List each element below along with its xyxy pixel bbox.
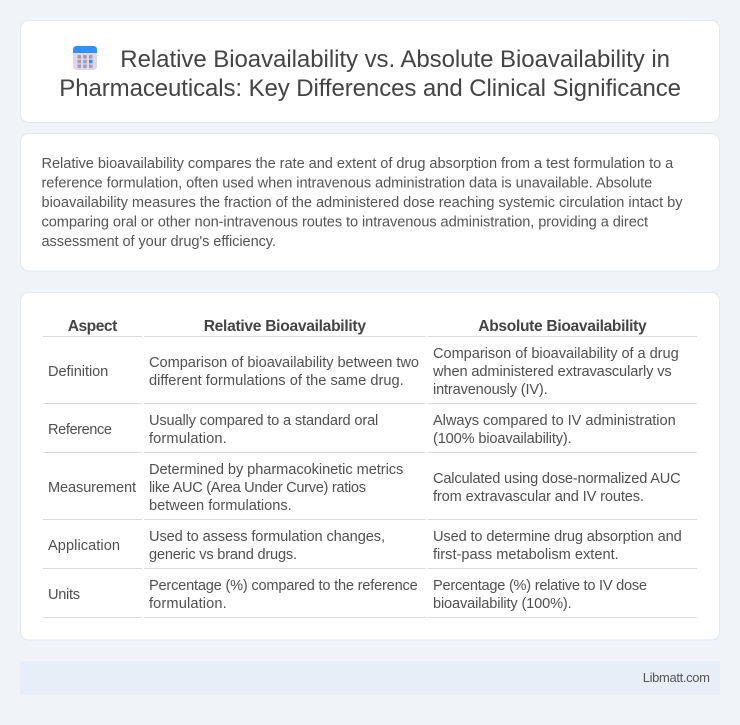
panel: comparison table (20, 292, 720, 640)
table row: definition: when administered extravascularly vs (432, 364, 672, 380)
panel: title header (20, 20, 720, 122)
table row: application: generic vs brand drugs. (149, 547, 297, 563)
title: Relative Bioavailability vs. Absolute Bioavailability in (120, 46, 670, 73)
icon: calendar (73, 46, 97, 70)
table row: units: Units (48, 587, 80, 603)
text block: introduction paragraph (42, 156, 683, 250)
table row: application: Used to assess formulation changes, (149, 529, 385, 545)
table row: measurement: like AUC (Area Under Curve) ratios (149, 480, 366, 496)
table row: definition: Comparison of bioavailability between two (149, 355, 419, 371)
table row: measurement: from extravascular and IV routes. (433, 489, 644, 505)
table row: units: Percentage (%) relative to IV dose (433, 578, 647, 594)
table row: definition (48, 346, 679, 398)
table row: reference: Reference (48, 422, 112, 438)
table row: application: Application (48, 538, 120, 554)
text block: introduction paragraph: assessment of your drug's efficiency. (42, 234, 276, 250)
table row: definition: different formulations of the same drug. (149, 373, 404, 389)
table row: reference: Always compared to IV administration (433, 413, 676, 429)
table row: measurement (48, 462, 681, 514)
table row: definition: intravenously (IV). (433, 382, 548, 398)
table row: units: bioavailability (100%). (433, 596, 572, 612)
table row: reference: Usually compared to a standard oral (149, 413, 378, 429)
title (59, 46, 681, 102)
table row: measurement: Calculated using dose-normalized AUC (433, 471, 681, 487)
table row: measurement: Measurement (48, 480, 136, 496)
text block: introduction paragraph: bioavailability measures the fraction of the administered dose reaching systemic circulation intact by (42, 195, 683, 211)
title: Pharmaceuticals: Key Differences and Clinical Significance (59, 75, 681, 102)
table row: definition: Comparison of bioavailability of a drug (433, 346, 679, 362)
table row: units (48, 578, 647, 612)
table row: measurement: between formulations. (149, 498, 292, 514)
text block: introduction paragraph: comparing oral or other non-intravenous routes to intravenous administration, providing a direct (42, 214, 648, 230)
table header row: Aspect (68, 318, 117, 335)
table header row: Relative Bioavailability (204, 318, 366, 335)
table row: application (48, 529, 682, 563)
text block: introduction paragraph: Relative bioavailability compares the rate and extent of drug absorption from a test formulation to a (42, 156, 674, 172)
panel: introduction (20, 134, 720, 271)
table row: reference (48, 413, 676, 447)
table header row: Absolute Bioavailability (478, 318, 647, 335)
text block: introduction paragraph: reference formulation, often used when intravenous administration data is unavailable. Absolute (42, 176, 652, 192)
table row: reference: formulation. (149, 431, 227, 447)
table row: units: formulation. (149, 596, 227, 612)
table row: measurement: Determined by pharmacokinetic metrics (149, 462, 403, 478)
table row: units: Percentage (%) compared to the reference (149, 578, 418, 594)
table row: application: first-pass metabolism extent. (433, 547, 619, 563)
footer credit: Libmatt.com (643, 670, 710, 685)
footer (20, 661, 720, 695)
table header row (68, 318, 647, 335)
table row: definition: Definition (48, 364, 108, 380)
table row: application: Used to determine drug absorption and (433, 529, 682, 545)
table row: reference: (100% bioavailability). (433, 431, 572, 447)
